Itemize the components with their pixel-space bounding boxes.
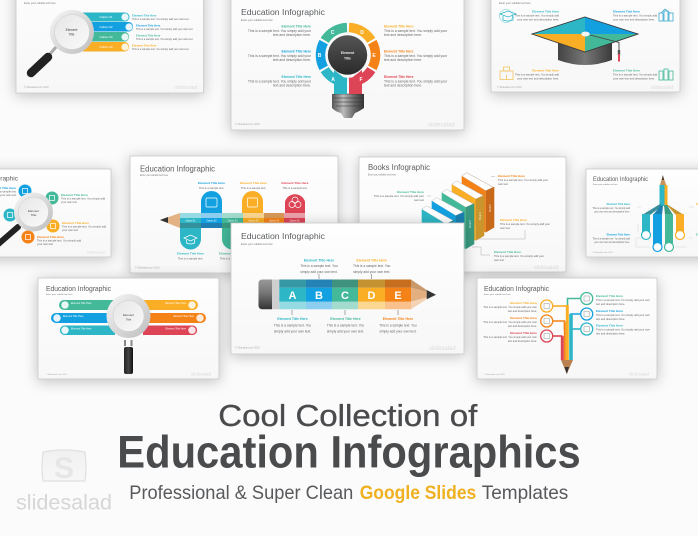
connector lines bbox=[427, 176, 525, 255]
panel: lightbulb slide top center: slidesalad bbox=[428, 122, 455, 128]
text blocks right: Element Title Here bbox=[384, 24, 414, 28]
panel: graduation cap slide top right bbox=[491, 0, 680, 92]
text blocks right: This is a sample text. You simply add your own bbox=[596, 328, 650, 332]
panel: magnifier slide top left: Enter your subtitle text here bbox=[24, 1, 56, 5]
text blocks left: This is a sample text. You simply add your own bbox=[483, 305, 538, 309]
panel: graduation cap slide top right: Enter your subtitle text here bbox=[499, 1, 531, 5]
book: orange bbox=[462, 173, 494, 232]
icon: horizontal pencil with pillars: Option 04 bbox=[249, 220, 259, 222]
icon: magnifier with six bars bbox=[51, 294, 206, 374]
icon: lightbulb ring: B bbox=[318, 53, 322, 59]
text blocks: Element Title Here bbox=[613, 10, 640, 14]
text blocks: Element Title Here bbox=[219, 252, 246, 256]
text blocks bbox=[0, 186, 107, 246]
text blocks: Element Title Here bbox=[532, 68, 559, 72]
text blocks right: Element Title Here bbox=[596, 309, 623, 313]
panel: lightbulb slide top center: Enter your subtitle text here bbox=[241, 18, 273, 22]
panel: pencil pillars slide bbox=[130, 156, 338, 273]
text blocks: your own text and description here. bbox=[594, 241, 630, 244]
icon: magnifier with circles: Title bbox=[31, 213, 37, 217]
heading: Education Infographic bbox=[46, 286, 111, 293]
text blocks: your own text and description here. bbox=[594, 210, 630, 214]
text blocks: This is a sample text. You simply add bbox=[613, 14, 658, 18]
text blocks left bbox=[248, 24, 312, 88]
title: Education Infographics bbox=[117, 426, 581, 478]
text blocks: Element Title Here bbox=[613, 68, 640, 72]
icon: horizontal pencil with pillars bbox=[160, 191, 305, 250]
panel: lightbulb slide top center bbox=[231, 0, 464, 130]
text blocks: This is a sample text. You simply add your bbox=[498, 178, 548, 182]
icon: lightbulb ring: Element bbox=[341, 51, 355, 55]
icon: magnifier with four option bars: Element bbox=[66, 28, 77, 32]
panel: graduation cap slide top right: slidesalad bbox=[651, 85, 673, 91]
panel: graduation cap slide top right: © Slidesalad.com 2018 bbox=[497, 86, 522, 89]
text blocks: This is a sample text. bbox=[282, 186, 308, 190]
icon: magnifier with circles: Element bbox=[28, 209, 39, 213]
panel: vertical pencil slide bottom right: © Slidesalad.com 2018 bbox=[484, 373, 505, 376]
panel: magnifier bars slide bottom left: © Slidesalad.com 2018 bbox=[46, 373, 67, 376]
text blocks left: Element Title Here bbox=[281, 75, 311, 79]
icon: magnifier with six bars: Element Title Here bbox=[173, 315, 195, 318]
subtitle bbox=[129, 482, 569, 504]
panel: vertical pencil slide bottom right: Enter your subtitle text here bbox=[484, 293, 512, 296]
text blocks: This is a sample text. You simply add your bbox=[374, 194, 424, 198]
text blocks left: Element Title Here bbox=[510, 331, 537, 335]
title bbox=[117, 398, 581, 478]
panel: featured pencil slide center: slidesalad bbox=[429, 346, 456, 352]
text blocks: This is a sample text. You simply add your bbox=[494, 254, 544, 258]
text blocks left: Element Title Here bbox=[510, 301, 537, 305]
text blocks: Element Title Here bbox=[132, 44, 157, 48]
panel: lightbulb slide top center: © Slidesalad.com 2018 bbox=[235, 123, 260, 126]
text blocks right: This is a sample text. You simply add your bbox=[384, 29, 448, 33]
text blocks: your own text and description here. bbox=[613, 76, 655, 80]
text blocks: This is a sample text. You simply add your own text bbox=[136, 38, 193, 41]
text blocks left: text and description here. bbox=[508, 309, 537, 313]
chart: stacked books: Book 3 bbox=[470, 220, 472, 228]
text blocks: your own text and description here. bbox=[613, 18, 655, 22]
text blocks: Element Title Here bbox=[61, 193, 88, 197]
panel: featured pencil slide center: © Slidesalad.com 2018 bbox=[235, 346, 260, 350]
icon: magnifier with six bars: Title bbox=[126, 318, 132, 322]
subtitle: Google Slides bbox=[360, 482, 476, 504]
text blocks top bbox=[300, 258, 391, 274]
chart: stacked books bbox=[422, 173, 494, 266]
text blocks left: Element Title Here bbox=[281, 24, 311, 28]
book: blue bbox=[432, 198, 464, 257]
text blocks: Element Title Here bbox=[607, 232, 630, 236]
text blocks: Element Title Here bbox=[607, 202, 630, 206]
icon: school outline bbox=[500, 67, 513, 80]
text blocks right: Element Title Here bbox=[596, 324, 623, 328]
icon: magnifier with six bars: Element Title Here bbox=[63, 315, 84, 318]
text blocks top: Element Title Here bbox=[304, 258, 334, 262]
text blocks: your own text and description here. bbox=[517, 18, 559, 22]
text blocks bbox=[132, 14, 193, 51]
text blocks: Element Title Here bbox=[136, 34, 161, 38]
text blocks top: Element Title Here bbox=[356, 258, 387, 262]
text blocks right: text and description here. bbox=[596, 317, 625, 321]
panel: rocket pencil slide right bbox=[586, 169, 698, 257]
text blocks bottom: Element Title Here bbox=[383, 317, 413, 321]
text blocks: This is a sample text. You simply add your own text bbox=[132, 18, 189, 21]
text blocks left: This is a sample text. You simply add your bbox=[248, 54, 312, 58]
text blocks right bbox=[384, 24, 448, 88]
text blocks left: This is a sample text. You simply add your own bbox=[483, 320, 538, 324]
text blocks right: This is a sample text. You simply add your own bbox=[596, 313, 650, 317]
icon: magnifier with four option bars: Title bbox=[69, 32, 75, 36]
logo: slidesalad: slidesalad bbox=[16, 492, 112, 514]
text blocks right: Element Title Here bbox=[384, 50, 414, 54]
book: teal bbox=[422, 206, 454, 266]
panel: pencil pillars slide: © Slidesalad.com 2018 bbox=[135, 266, 160, 270]
icon: horizontal pencil with pillars: Option 06 bbox=[290, 220, 300, 222]
text blocks: own text bbox=[414, 198, 424, 202]
panel: magnifier bars slide bottom left bbox=[38, 278, 219, 379]
text blocks: This is a sample text. You simply add bbox=[515, 14, 559, 18]
icon: magnifier with four option bars: Option 01 bbox=[99, 15, 113, 19]
text blocks: This is a sample text. You simply add bbox=[37, 238, 82, 242]
text blocks left: This is a sample text. You simply add your own bbox=[483, 335, 538, 339]
text blocks bottom: This is a sample text. You bbox=[274, 324, 311, 328]
text blocks right: This is a sample text. You simply add your bbox=[384, 54, 448, 58]
panel: magnifier circles slide left: slidesalad bbox=[87, 250, 105, 254]
connector lines bbox=[292, 274, 398, 315]
icon: magnifier with circles bbox=[0, 184, 60, 246]
text blocks right: text and description here. bbox=[596, 332, 625, 336]
panel: magnifier slide top left: slidesalad bbox=[175, 85, 197, 91]
icon: lightbulb ring: F bbox=[359, 77, 363, 83]
panel: magnifier bars slide bottom left: slidesalad bbox=[191, 372, 212, 376]
text blocks: This is a sample text. You simply add bbox=[613, 72, 658, 76]
text blocks: your own text bbox=[62, 228, 78, 232]
logo: slidesalad bbox=[16, 450, 112, 514]
text blocks left: text and description here. bbox=[273, 58, 311, 62]
text blocks left: text and description here. bbox=[508, 324, 537, 328]
text blocks: This is a sample text. bbox=[241, 186, 266, 190]
text blocks top: This is a sample text. You bbox=[300, 264, 338, 268]
text blocks bottom bbox=[274, 317, 417, 334]
panel: vertical pencil slide bottom right bbox=[477, 278, 657, 379]
text blocks: own text bbox=[500, 226, 510, 230]
panel: rocket pencil slide right: Enter your subtitle text here bbox=[593, 183, 618, 186]
text blocks top: simply add your own text. bbox=[353, 270, 390, 274]
text blocks: your own text bbox=[0, 193, 16, 197]
panel: featured pencil slide center: Enter your subtitle text here bbox=[241, 242, 273, 246]
text blocks: Element Title Here bbox=[494, 250, 521, 254]
icon: magnifier with six bars: Element bbox=[123, 313, 134, 317]
icon: books outline bbox=[659, 9, 673, 21]
text blocks left: Element Title Here bbox=[281, 50, 311, 54]
text blocks bbox=[515, 10, 658, 80]
icon: magnifier with six bars: Element Title Here bbox=[165, 328, 187, 330]
text blocks left: text and description here. bbox=[273, 33, 311, 37]
text blocks right: text and description here. bbox=[596, 302, 625, 306]
text blocks: Element Title Here bbox=[177, 252, 204, 256]
text blocks: This is a sample text. You simply add your own text bbox=[132, 48, 189, 51]
icon: graduation cap bbox=[532, 17, 638, 65]
text blocks: Element Title Here bbox=[62, 221, 89, 225]
panel: books slide: slidesalad bbox=[534, 265, 558, 271]
subtitle: Professional & Super Clean bbox=[129, 482, 353, 504]
text blocks right: This is a sample text. You simply add your own bbox=[596, 298, 650, 302]
text blocks bbox=[374, 174, 550, 262]
icon: horizontal pencil with pillars: Option 01 bbox=[186, 220, 196, 222]
icon: pencil ABCDE: D bbox=[368, 290, 376, 302]
text blocks: Element Title Here bbox=[198, 181, 225, 185]
text blocks right: text and description here. bbox=[384, 58, 422, 62]
icon: lightbulb ring: E bbox=[372, 53, 376, 59]
subtitle: Templates bbox=[482, 482, 569, 504]
icon: magnifier with four option bars bbox=[31, 10, 133, 73]
text blocks bottom: This is a sample text. You bbox=[327, 324, 364, 328]
panel: pencil pillars slide: Enter your subtitle text here bbox=[140, 174, 169, 177]
text blocks: own text bbox=[498, 182, 508, 186]
text blocks: This is a sample text. bbox=[220, 256, 245, 260]
text blocks: This is a sample text. bbox=[178, 256, 203, 260]
title: Cool Collection of bbox=[218, 398, 478, 433]
text blocks right: Element Title Here bbox=[384, 75, 414, 79]
panel: magnifier bars slide bottom left: Enter your subtitle text here bbox=[46, 293, 74, 296]
icon: pencil tree bbox=[541, 292, 593, 374]
text blocks: This is a sample text. You simply add bbox=[592, 207, 631, 210]
icon: magnifier with six bars: Element Title Here bbox=[71, 328, 92, 330]
text blocks: your own text bbox=[61, 200, 77, 204]
icon: horizontal pencil with pillars: Option 05 bbox=[269, 220, 280, 222]
text blocks: Element Title Here bbox=[132, 14, 157, 18]
text blocks right: Element Title Here bbox=[596, 294, 623, 298]
icon: bottles outline bbox=[659, 69, 673, 80]
icon: horizontal pencil with pillars: Option 03 bbox=[228, 220, 238, 222]
text blocks top: simply add your own text. bbox=[300, 270, 338, 274]
icon: magnifier with four option bars: Option 03 bbox=[99, 35, 113, 39]
chart: stacked books: Book 4 bbox=[480, 212, 482, 220]
logo: slidesalad: S bbox=[54, 452, 74, 485]
text blocks: This is a sample text. You simply add bbox=[592, 238, 631, 240]
text blocks right: text and description here. bbox=[384, 84, 422, 88]
text blocks: This is a sample text. You simply add your own text bbox=[136, 28, 193, 31]
text blocks bbox=[177, 181, 309, 260]
icon: pencil ABCDE bbox=[258, 280, 436, 309]
text blocks: Element Title Here bbox=[397, 190, 424, 194]
heading: Education Infographic bbox=[140, 164, 215, 174]
icon: magnifier with six bars: Element Title Here bbox=[165, 302, 187, 305]
icon: pencil ABCDE: E bbox=[394, 290, 402, 302]
text blocks: This is a sample text. You simply add bbox=[62, 224, 107, 228]
icon: magnifier with four option bars: Option 04 bbox=[99, 45, 113, 49]
text blocks: This is a sample text. You simply add bbox=[515, 72, 559, 76]
text blocks: Element Title Here bbox=[498, 174, 525, 178]
panel: rocket pencil slide right: © Slidesalad.com 2018 bbox=[592, 251, 613, 254]
text blocks left: This is a sample text. You simply add your bbox=[248, 79, 312, 83]
text blocks bbox=[592, 202, 698, 244]
panel: magnifier circles slide left bbox=[0, 169, 111, 257]
text blocks bottom: simply add your own text. bbox=[327, 330, 364, 334]
text blocks right: This is a sample text. You simply add your bbox=[384, 79, 448, 83]
heading: Education Infographic bbox=[241, 231, 326, 241]
text blocks: This is a sample text. bbox=[199, 186, 224, 190]
panel: books slide: Enter your subtitle text here bbox=[368, 174, 397, 176]
text blocks: your own text bbox=[37, 242, 53, 246]
text blocks: Element Title Here bbox=[282, 181, 309, 185]
heading: Education Infographic bbox=[593, 177, 648, 183]
icon: pencil with fan legs bbox=[636, 175, 694, 252]
book: green bbox=[442, 189, 474, 249]
text blocks right bbox=[596, 294, 650, 336]
text blocks: This is a sample text. You simply add your bbox=[500, 222, 550, 226]
chart: stacked books: Book 5 bbox=[490, 204, 492, 212]
text blocks bottom: Element Title Here bbox=[330, 317, 361, 321]
text blocks: your own text and description here. bbox=[517, 76, 559, 80]
icon: pencil ABCDE: A bbox=[289, 290, 297, 302]
text blocks: Element Title Here bbox=[136, 24, 161, 28]
text blocks bottom: Element Title Here bbox=[277, 317, 308, 321]
icon: lightbulb ring bbox=[318, 28, 376, 118]
panel: books slide bbox=[359, 157, 566, 272]
text blocks bottom: simply add your own text. bbox=[379, 330, 417, 334]
heading: Education Infographic bbox=[241, 7, 326, 17]
panel: featured pencil slide center bbox=[231, 223, 464, 354]
icon: lightbulb ring: C bbox=[331, 30, 335, 36]
text blocks left: text and description here. bbox=[273, 84, 311, 88]
icon: cap outline bbox=[500, 10, 516, 22]
text blocks left: text and description here. bbox=[508, 339, 537, 343]
text blocks: Element Title Here bbox=[532, 10, 559, 14]
icon: lightbulb ring: Title bbox=[344, 56, 351, 60]
text blocks top: This is a sample text. You bbox=[353, 264, 391, 268]
heading: Books Infographic bbox=[368, 163, 430, 172]
icon: pencil ABCDE: C bbox=[341, 290, 349, 302]
icon: lightbulb ring: A bbox=[331, 77, 335, 83]
book: gold bbox=[452, 181, 484, 241]
heading: Education Infographic bbox=[484, 286, 549, 293]
icon: magnifier with six bars: Element Title Here bbox=[71, 302, 92, 305]
text blocks bottom: simply add your own text. bbox=[274, 330, 311, 334]
panel: magnifier slide top left bbox=[16, 0, 204, 93]
text blocks: This is a sample text. You simply add bbox=[61, 196, 106, 200]
icon: horizontal pencil with pillars: Option 02 bbox=[207, 220, 217, 222]
text blocks left bbox=[483, 301, 538, 343]
text blocks: own text bbox=[494, 258, 504, 262]
text blocks: Element Title Here bbox=[500, 218, 527, 222]
text blocks bottom: This is a sample text. You bbox=[379, 324, 417, 328]
text blocks left: Element Title Here bbox=[510, 316, 537, 320]
icon: pencil ABCDE: B bbox=[315, 290, 323, 302]
text blocks: Element Title Here bbox=[240, 181, 267, 185]
text blocks right: text and description here. bbox=[384, 33, 422, 37]
text blocks left: This is a sample text. You simply add your bbox=[248, 29, 312, 33]
icon: magnifier with four option bars: Option 02 bbox=[99, 25, 113, 29]
text blocks: Element Title Here bbox=[37, 235, 64, 239]
icon: lightbulb ring: D bbox=[360, 30, 364, 36]
panel: magnifier slide top left: © Slidesalad.com 2018 bbox=[24, 86, 49, 89]
panel: vertical pencil slide bottom right: slidesalad bbox=[629, 372, 650, 376]
